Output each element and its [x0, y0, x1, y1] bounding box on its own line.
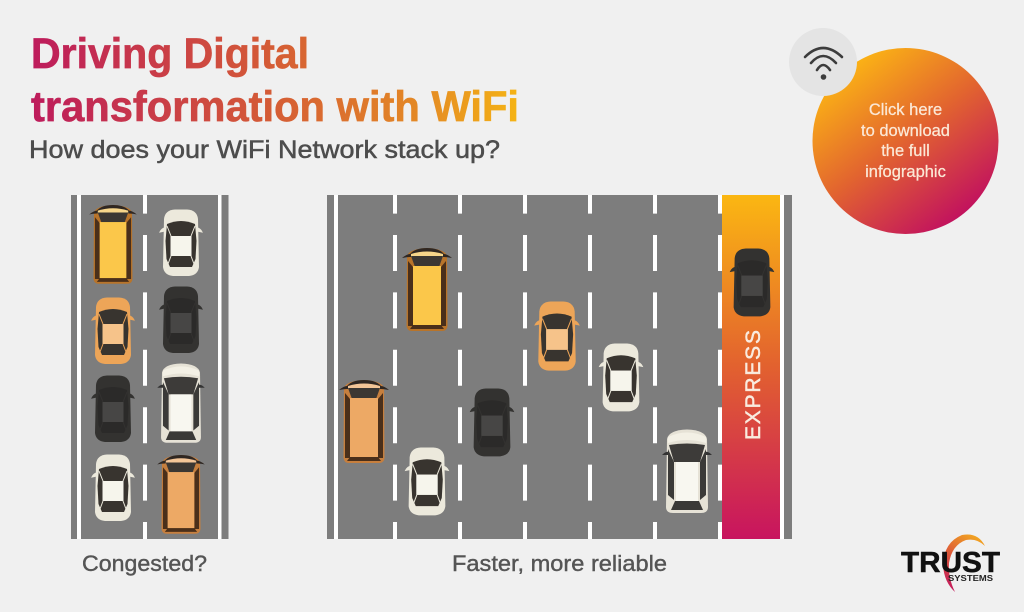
label: faster: Faster, more reliable	[452, 551, 667, 576]
callout text: the full	[881, 142, 930, 160]
panel: express lane	[722, 195, 792, 539]
title: Driving Digital	[31, 30, 309, 78]
car: black	[92, 376, 134, 442]
title: transformation with WiFi	[31, 83, 519, 131]
car: orange	[535, 302, 579, 371]
car: black	[160, 286, 202, 353]
car: white suv	[662, 430, 712, 513]
subtitle: How does your WiFi Network stack up?	[29, 136, 500, 164]
callout: download circle	[812, 48, 998, 234]
car: orange	[92, 298, 134, 364]
car: white	[406, 448, 448, 515]
express lane label: EXPRESS	[742, 330, 765, 440]
car: white suv	[157, 363, 205, 443]
callout text	[861, 101, 950, 181]
label: congested: Congested?	[82, 551, 207, 576]
panel: multi-lane road	[327, 195, 722, 539]
title	[31, 30, 519, 131]
car: black express	[731, 249, 773, 316]
callout text: infographic	[865, 163, 946, 181]
logo: Trust Systems: TRUST	[901, 547, 1000, 579]
panel: congested road	[71, 195, 228, 539]
car: white	[92, 454, 134, 521]
car: white	[600, 344, 642, 411]
callout text: Click here	[869, 101, 942, 119]
car: white	[160, 210, 202, 276]
logo: Trust Systems	[901, 534, 1000, 592]
logo: Trust Systems: SYSTEMS	[948, 573, 993, 583]
car: orange van	[157, 455, 205, 534]
car: yellow van	[89, 205, 137, 284]
car: black	[471, 389, 513, 456]
icon: wifi	[789, 28, 857, 96]
callout text: to download	[861, 122, 950, 140]
car: orange van	[339, 380, 389, 463]
car: yellow van	[402, 248, 452, 331]
